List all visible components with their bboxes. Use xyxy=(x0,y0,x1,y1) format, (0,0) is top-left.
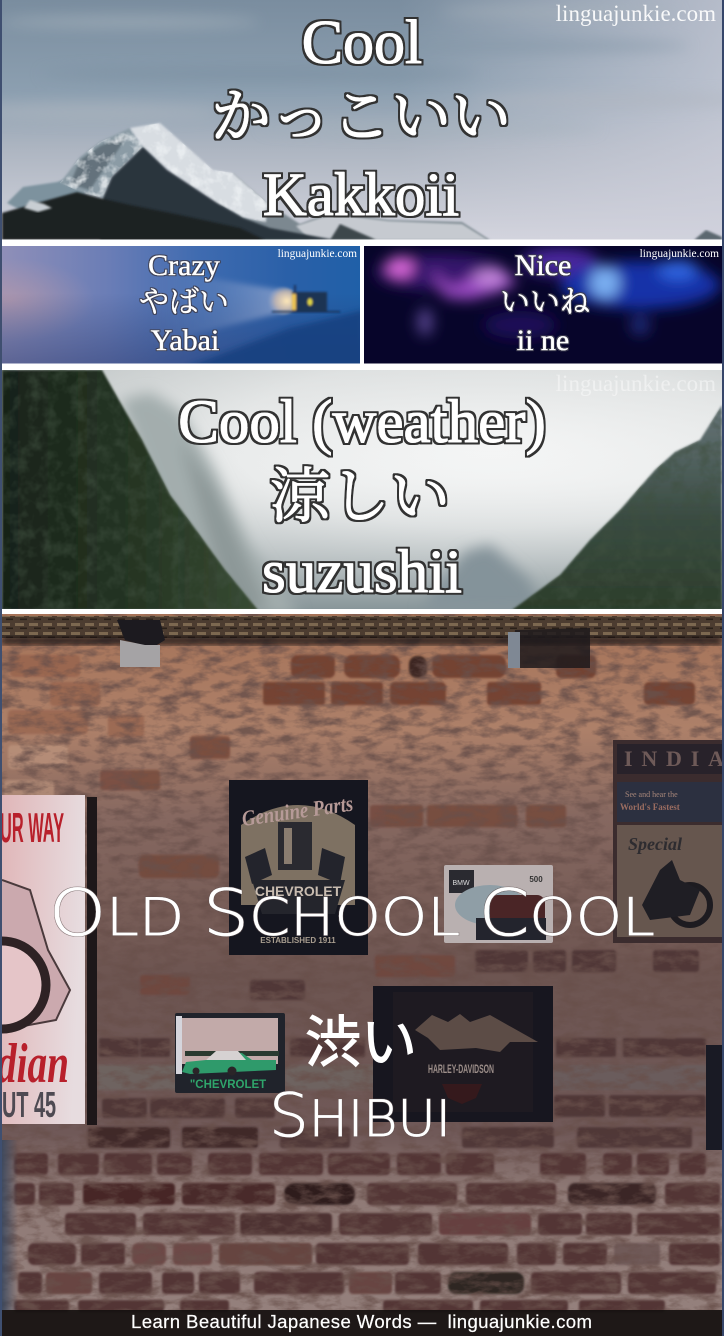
japanese: shibui: 渋い xyxy=(305,998,417,1079)
bricks xyxy=(4,655,720,1312)
heading: Cool (weather): Cool (weather) xyxy=(178,389,546,456)
panel: Crazy / Yabai xyxy=(0,246,364,368)
brick rows lower wall xyxy=(14,1153,720,1312)
wall texture xyxy=(2,614,722,1310)
watermark: linguajunkie.com xyxy=(556,1,716,26)
romaji: suzushii: suzushii xyxy=(262,539,462,606)
romaji: Shibui: SHIBUI xyxy=(269,1081,451,1151)
poster: left motorcycle: UR WAY xyxy=(0,804,64,851)
poster: BMW car: 500 xyxy=(529,875,543,884)
heading: Old School Cool: OLD SCHOOL COOL xyxy=(49,877,655,951)
poster: left motorcycle xyxy=(0,795,97,1125)
romaji: Kakkoii: Kakkoii xyxy=(263,162,459,229)
panel: Nice / ii ne xyxy=(364,246,722,364)
watermark: linguajunkie.com xyxy=(556,371,716,396)
frame: left edge strip xyxy=(0,0,2,1336)
poster: Genuine Parts Chevrolet: Genuine Parts xyxy=(240,791,355,831)
poster: Genuine Parts Chevrolet: CHEVROLET xyxy=(255,883,342,899)
frame: right edge strip xyxy=(722,0,724,1336)
panel: Old School Cool brick wall xyxy=(0,614,724,1336)
heading: Crazy: Crazy xyxy=(148,249,220,282)
poster: Chevrolet green car xyxy=(175,1013,285,1093)
footer bar xyxy=(2,1310,722,1336)
heading: Nice: Nice xyxy=(515,249,571,282)
poster: BMW car xyxy=(444,865,553,943)
poster: Genuine Parts Chevrolet: ESTABLISHED 1911 xyxy=(260,936,336,945)
panel: Cool weather / suzushii xyxy=(2,370,722,615)
poster: BMW car: BMW xyxy=(452,880,470,887)
romaji: Yabai: Yabai xyxy=(151,324,219,357)
light beam xyxy=(176,276,292,334)
mountain: snow peak xyxy=(2,120,722,240)
japanese: yabai: やばい xyxy=(139,277,229,321)
poster: Chevrolet green car: "CHEVROLET xyxy=(190,1079,266,1091)
japanese: ii ne: いいね xyxy=(500,277,590,321)
poster: right edge dark xyxy=(706,1045,722,1150)
icon: hut xyxy=(272,285,340,312)
japanese: suzushii: 涼しい xyxy=(270,449,450,535)
panel: Cool / Kakkoii mountain xyxy=(0,0,724,240)
romaji: ii ne: ii ne xyxy=(517,324,569,357)
poster: Harley-Davidson eagle xyxy=(373,986,553,1122)
poster: Indian motorcycle xyxy=(613,740,724,943)
poster: Indian motorcycle: Special xyxy=(628,834,682,854)
heading: Cool: Cool xyxy=(302,9,422,77)
poster: Indian motorcycle: See and hear the xyxy=(625,790,678,799)
poster: Indian motorcycle: World's Fastest xyxy=(620,802,680,812)
mountain: right xyxy=(512,405,722,610)
shelf: metal rail xyxy=(2,616,722,668)
poster: left motorcycle: UT 45 xyxy=(2,1084,56,1125)
poster: Harley-Davidson eagle: HARLEY-DAVIDSON xyxy=(428,1064,494,1076)
footer text: Learn Beautiful Japanese Words — linguajunkie.com xyxy=(131,1311,592,1332)
poster: Indian motorcycle: INDIA xyxy=(624,746,724,771)
watermark: linguajunkie.com xyxy=(640,248,719,260)
watermark: linguajunkie.com xyxy=(278,248,357,260)
mountain: left xyxy=(2,370,258,610)
wall: left edge shadow xyxy=(2,1140,18,1310)
poster: left motorcycle: dian xyxy=(0,1033,69,1095)
poster: Genuine Parts Chevrolet xyxy=(229,780,368,955)
japanese: kakkoii: かっこいい xyxy=(211,69,511,155)
